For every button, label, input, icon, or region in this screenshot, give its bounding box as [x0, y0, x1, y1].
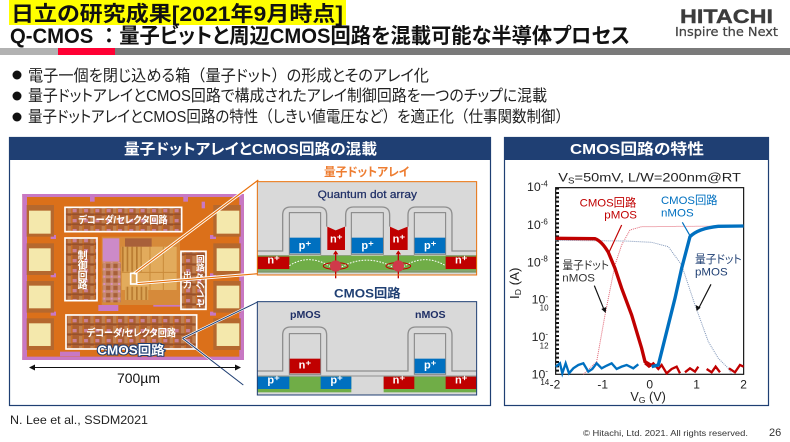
bullet list — [12, 67, 570, 126]
curve annotations: CMOS回路 — [580, 195, 637, 209]
y axis labels: 10 — [532, 293, 545, 307]
logo: Hitachi — [675, 6, 778, 39]
diagram: CMOS cross section: CMOS回路 — [334, 286, 401, 301]
y axis labels: -8 — [541, 255, 548, 264]
diagram: quantum dot array cross section: n⁺ — [393, 233, 405, 245]
x axis labels — [550, 377, 747, 391]
bullet list: 量子ドットアレイとCMOS回路の特性（しきい値電圧など）を適正化（仕事関数制御） — [28, 108, 570, 126]
chip micrograph: デコーダ/セレクタ回路 — [78, 213, 168, 226]
diagram: quantum dot array cross section: p⁺ — [299, 240, 311, 252]
chip micrograph: CMOS回路 — [97, 343, 165, 358]
red noise — [645, 363, 744, 373]
chart: ID-VG curves: (V) — [646, 390, 666, 404]
y axis labels: 10 — [527, 180, 541, 194]
chart: ID-VG curves — [507, 171, 747, 405]
panel: integration of quantum dot array and CMOS — [9, 137, 491, 406]
bullet list: 量子ドットアレイとCMOS回路で構成されたアレイ制御回路を一つのチップに混載 — [28, 87, 547, 105]
block outlines and labels — [65, 207, 206, 349]
diagram: quantum dot array cross section: n⁺ — [330, 233, 343, 245]
x axis labels: 2 — [740, 377, 747, 391]
y axis labels: 10 — [532, 367, 545, 381]
connector lines: chip to zoomed cross sections — [131, 180, 258, 385]
diagram: quantum dot array cross section: Quantum dot array — [318, 189, 418, 201]
chip micrograph: 出力 — [182, 270, 192, 289]
diagram: CMOS cross section: n⁺ — [455, 375, 468, 387]
y axis labels: 10 — [527, 218, 541, 232]
chart: ID-VG curves: (A) — [507, 268, 522, 289]
dotted curves — [583, 226, 744, 374]
scale bar: 700 micrometres: 700µm — [117, 370, 160, 386]
chart: ID-VG curves: =50mV, L/W=200nm@RT — [575, 171, 742, 185]
curve annotations — [562, 193, 742, 285]
y axis labels: 14 — [540, 378, 550, 387]
chart: ID-VG curves: D — [513, 289, 523, 295]
diagram: CMOS cross section: nMOS — [415, 310, 446, 321]
logo: Hitachi: HITACHI — [680, 6, 773, 28]
diagram: quantum dot array cross section — [257, 165, 477, 278]
page number: 26 — [769, 427, 781, 439]
curve annotations: pMOS — [604, 209, 637, 221]
y axis labels: 10 — [540, 303, 549, 312]
y axis labels: -6 — [541, 217, 548, 226]
chip micrograph: 制御回路 — [75, 249, 87, 291]
curve annotations: 量子ドット — [695, 253, 742, 266]
y axis labels: - — [545, 329, 548, 338]
citation: N. Lee et al., SSDM2021 — [10, 413, 148, 427]
circuit blocks — [65, 207, 182, 232]
panel: CMOS characteristics — [504, 137, 769, 406]
diagram: CMOS cross section: n⁺ — [299, 359, 311, 371]
diagram: quantum dot array cross section: 量子ドットアレイ — [324, 165, 409, 179]
diagram: CMOS cross section — [257, 286, 477, 395]
diagram: CMOS cross section: p⁺ — [424, 359, 437, 371]
diagram: CMOS cross section: n⁺ — [393, 375, 405, 387]
chart: ID-VG curves: I — [507, 295, 522, 299]
diagram: CMOS cross section: p⁺ — [330, 375, 343, 387]
panel heading: characteristics: CMOS回路の特性 — [570, 140, 704, 158]
y axis labels: 10 — [527, 255, 541, 269]
copyright: © Hitachi, Ltd. 2021. All rights reserved. — [583, 428, 748, 438]
bullet list: 電子一個を閉じ込める箱（量子ドット）の形成とそのアレイ化 — [28, 67, 429, 85]
curve annotations: nMOS — [562, 273, 595, 285]
chip micrograph: セレクタ — [194, 273, 205, 308]
curve annotations: pMOS — [695, 267, 728, 279]
chip micrograph — [22, 194, 244, 360]
chip micrograph: デコーダ/セレクタ回路 — [86, 327, 176, 340]
x axis labels: 0 — [646, 377, 653, 391]
chart: ID-VG curves: S — [568, 177, 575, 186]
chip micrograph: 回路 — [195, 254, 205, 273]
diagram: quantum dot array cross section: p⁺ — [361, 240, 374, 252]
curve annotations: CMOS回路 — [661, 193, 718, 207]
y axis labels: 10 — [532, 330, 545, 344]
x axis labels: 1 — [693, 377, 700, 391]
x axis labels: -2 — [550, 377, 561, 391]
annotation arrows — [594, 222, 711, 313]
red thick curve — [556, 238, 652, 366]
y axis labels: - — [545, 292, 548, 301]
y axis labels: -4 — [541, 179, 548, 188]
blue noise — [556, 363, 638, 373]
curve annotations: 量子ドット — [562, 259, 609, 272]
y axis labels: - — [545, 367, 548, 376]
panel heading: integration: 量子ドットアレイとCMOS回路の混載 — [124, 140, 377, 158]
y axis labels — [527, 179, 550, 387]
logo: Hitachi: Inspire the Next — [675, 24, 778, 39]
x axis labels: -1 — [597, 377, 608, 391]
title: research results heading: 日立の研究成果[2021年9月時点] — [11, 2, 343, 26]
diagram: quantum dot array cross section: n⁺ — [267, 254, 280, 266]
curve annotations: nMOS — [661, 207, 694, 219]
chart: ID-VG curves: V — [558, 171, 566, 185]
pads — [27, 205, 241, 350]
diagram: CMOS cross section: p⁺ — [267, 375, 280, 387]
chart: ID-VG curves: V — [630, 390, 639, 404]
subtitle: Q-CMOS description: Q-CMOS ：量子ビットと周辺CMOS回路を混載可能な半導体プロセス — [10, 25, 630, 48]
title rule — [0, 48, 790, 55]
scale bar: 700 micrometres — [29, 364, 241, 386]
y axis ticks — [552, 188, 562, 374]
chart: ID-VG curves: G — [639, 395, 646, 405]
diagram: quantum dot array cross section: n⁺ — [455, 254, 468, 266]
diagram: quantum dot array cross section: p⁺ — [424, 240, 437, 252]
diagram: CMOS cross section: pMOS — [290, 310, 321, 321]
y axis labels: 12 — [540, 341, 549, 350]
blue thick curve — [652, 226, 744, 367]
